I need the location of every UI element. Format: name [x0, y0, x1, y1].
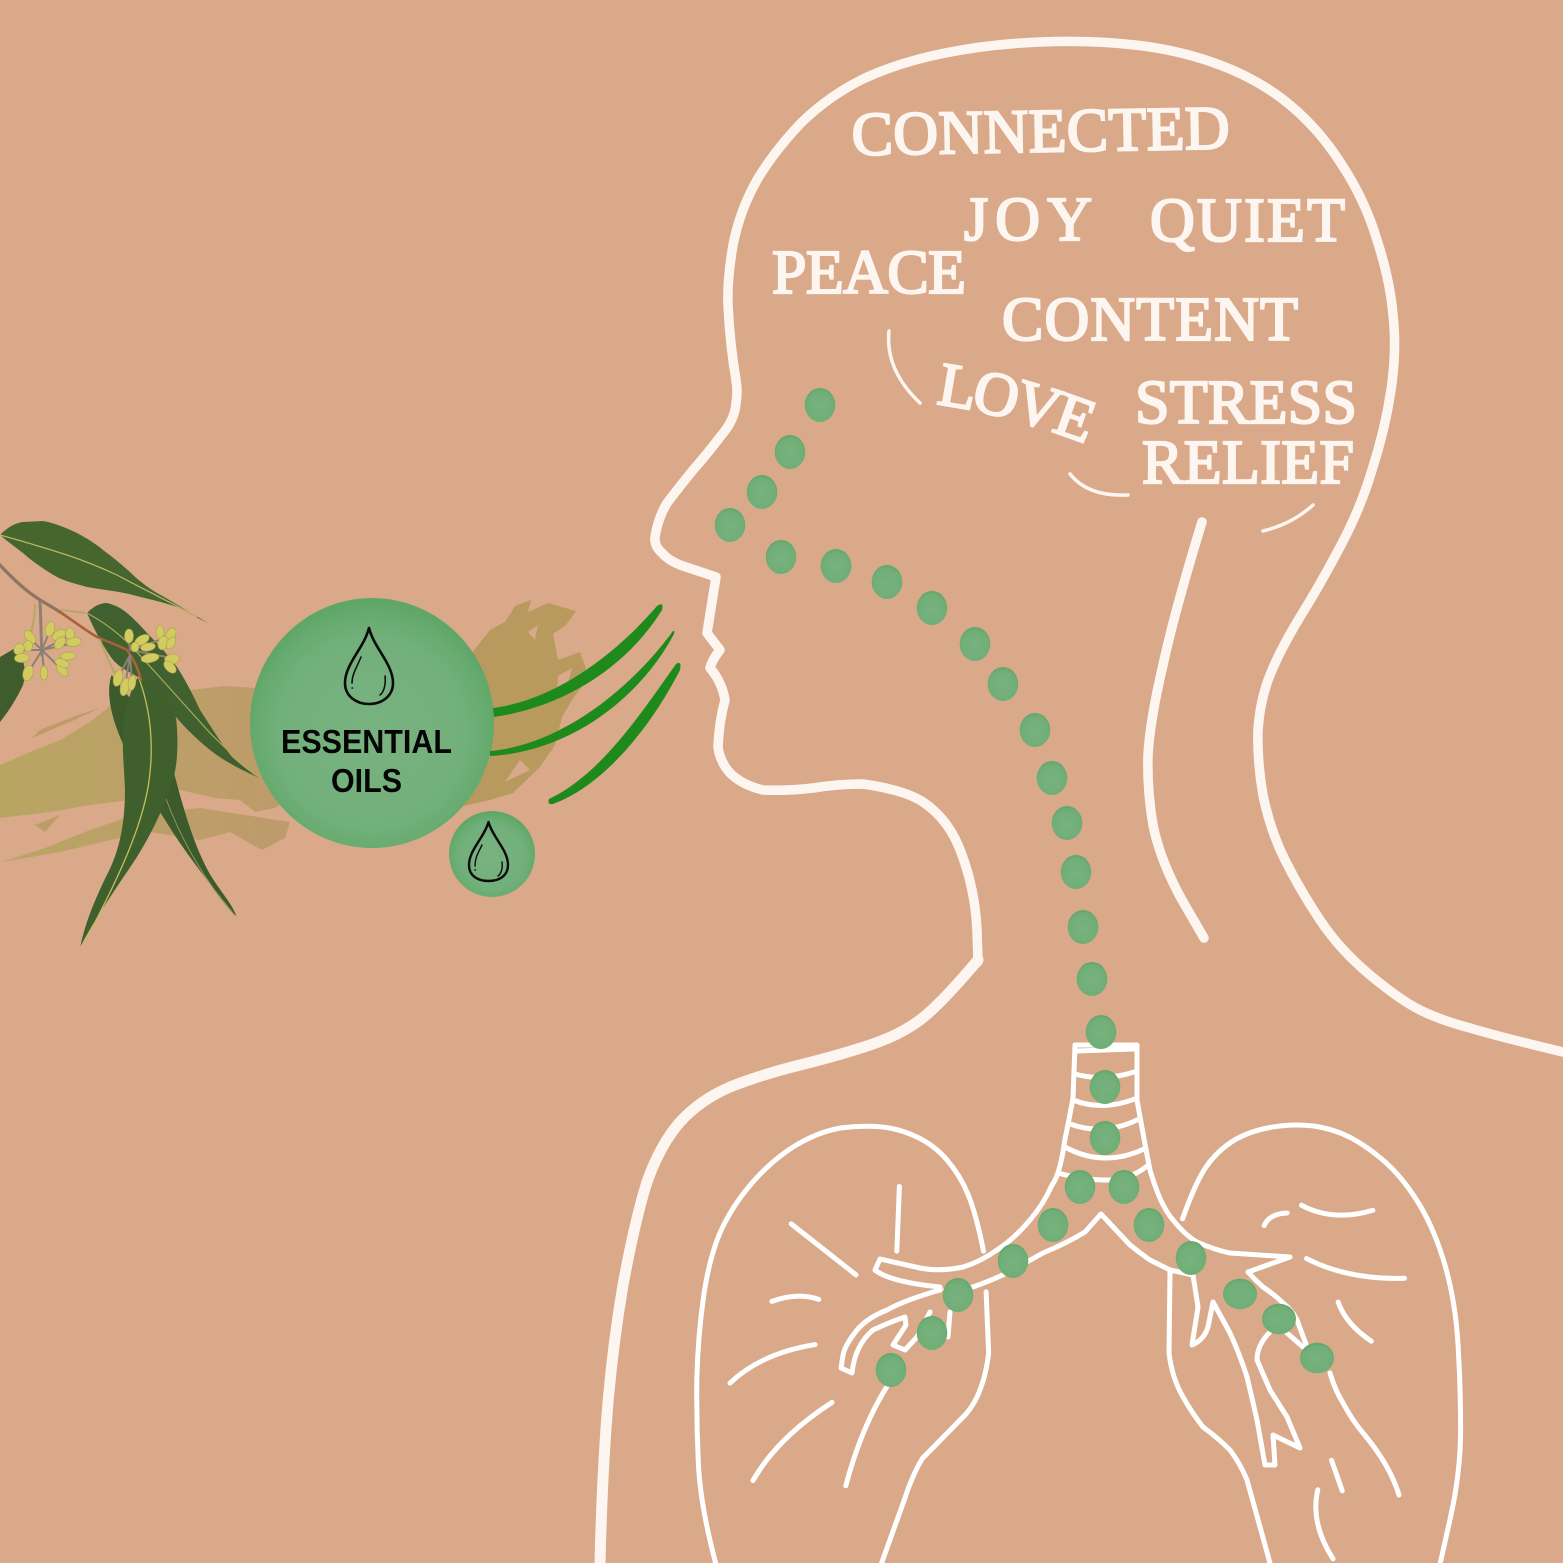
trachea rings — [1058, 1049, 1147, 1180]
right lung inner edge — [1169, 1272, 1270, 1563]
breath dots: nose, throat, trachea and bronchi — [715, 388, 1334, 1387]
words in head: CONTENT — [1002, 286, 1298, 354]
bronchi lower wall — [945, 1214, 1193, 1290]
words in head: STRESS — [1135, 369, 1357, 437]
label: essential oils: ESSENTIAL — [281, 724, 452, 761]
stem — [0, 565, 172, 687]
small oil drop circle — [449, 811, 535, 897]
icon: large oil drop — [345, 628, 393, 704]
right bronchus branch — [1192, 1275, 1303, 1465]
leaf: far left — [0, 647, 25, 722]
words in head — [772, 94, 1357, 497]
words in head: RELIEF — [1142, 429, 1354, 497]
essential oils circle — [250, 598, 494, 848]
leaf: middle right — [87, 603, 259, 778]
icon: small oil drop — [469, 822, 508, 881]
trachea and left bronchus — [875, 1045, 1075, 1287]
left bronchus lobe — [841, 1290, 950, 1373]
leaf: top — [0, 521, 208, 623]
brain accent arcs — [889, 331, 1313, 531]
trachea right wall and right lobe — [1075, 1045, 1399, 1495]
leaf: long front — [80, 677, 177, 947]
words in head: PEACE — [772, 239, 966, 307]
label: essential oils: OILS — [331, 763, 402, 800]
words in head: CONNECTED — [851, 94, 1230, 169]
bud cluster: right — [111, 626, 180, 697]
left lung — [697, 1126, 989, 1563]
bud cluster: left — [12, 621, 82, 682]
right lung — [1183, 1125, 1461, 1563]
words in head: JOY — [964, 186, 1092, 254]
words in head: LOVE — [936, 362, 1096, 444]
words in head: QUIET — [1150, 187, 1345, 255]
scent lines — [490, 604, 680, 804]
brush strokes behind oil circle — [0, 600, 586, 862]
long leaves — [80, 675, 237, 947]
eucalyptus branch — [0, 521, 259, 947]
leaf: long back — [109, 675, 237, 917]
lungs and trachea — [697, 1045, 1461, 1563]
head and torso outline — [600, 41, 1563, 1563]
